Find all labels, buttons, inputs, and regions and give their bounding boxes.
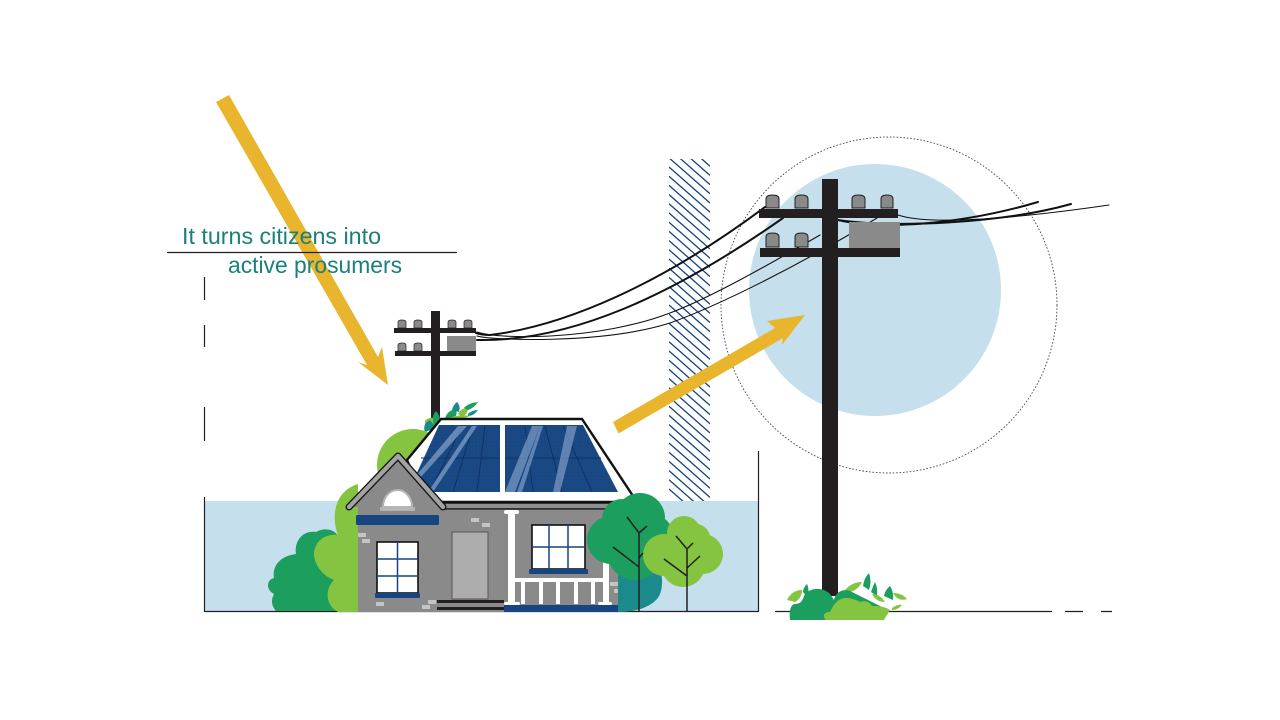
left wall dashed line — [204, 277, 206, 612]
teal bush — [618, 570, 662, 612]
infographic scene — [167, 95, 1112, 620]
house — [349, 419, 633, 612]
blue lintel — [356, 515, 439, 525]
dark green tree — [587, 493, 673, 580]
leaves behind roof — [424, 402, 478, 432]
roof — [407, 419, 633, 502]
steps — [437, 602, 504, 608]
gable trim — [349, 456, 443, 507]
left light green bush — [314, 484, 358, 612]
gable — [350, 460, 441, 516]
hatched column — [669, 159, 710, 501]
yellow arrow from house to grid — [613, 315, 805, 434]
left window — [375, 542, 420, 598]
right wall line — [758, 451, 760, 612]
dark bush — [790, 589, 882, 620]
caption line 2: active prosumers — [228, 252, 402, 278]
eave — [443, 503, 612, 509]
light bush — [824, 598, 890, 620]
dotted orbit circle — [721, 137, 1057, 473]
gable trim inner — [349, 456, 443, 507]
text rule — [167, 252, 457, 254]
yellow arrow from sun to house — [216, 95, 388, 385]
leaves — [787, 573, 907, 610]
light green tree — [643, 516, 723, 587]
power wires — [476, 202, 1109, 340]
porch — [504, 510, 618, 612]
door — [452, 532, 488, 599]
solar panel left — [415, 425, 500, 492]
brick details — [358, 518, 618, 609]
left dark green bush — [268, 529, 350, 611]
ground line — [205, 610, 1112, 612]
small utility pole — [394, 311, 476, 426]
big utility pole — [759, 179, 900, 596]
attic window — [380, 490, 415, 511]
solar panel right — [505, 425, 618, 492]
light blue sun circle — [749, 164, 1001, 416]
right window — [529, 525, 588, 574]
caption line 1: It turns citizens into — [182, 223, 381, 249]
ground band — [205, 501, 758, 611]
bush and leaves at pole base — [787, 573, 907, 620]
wall — [358, 510, 618, 612]
tree branches — [613, 517, 700, 612]
trees — [587, 493, 723, 612]
upper green bush — [377, 429, 449, 501]
